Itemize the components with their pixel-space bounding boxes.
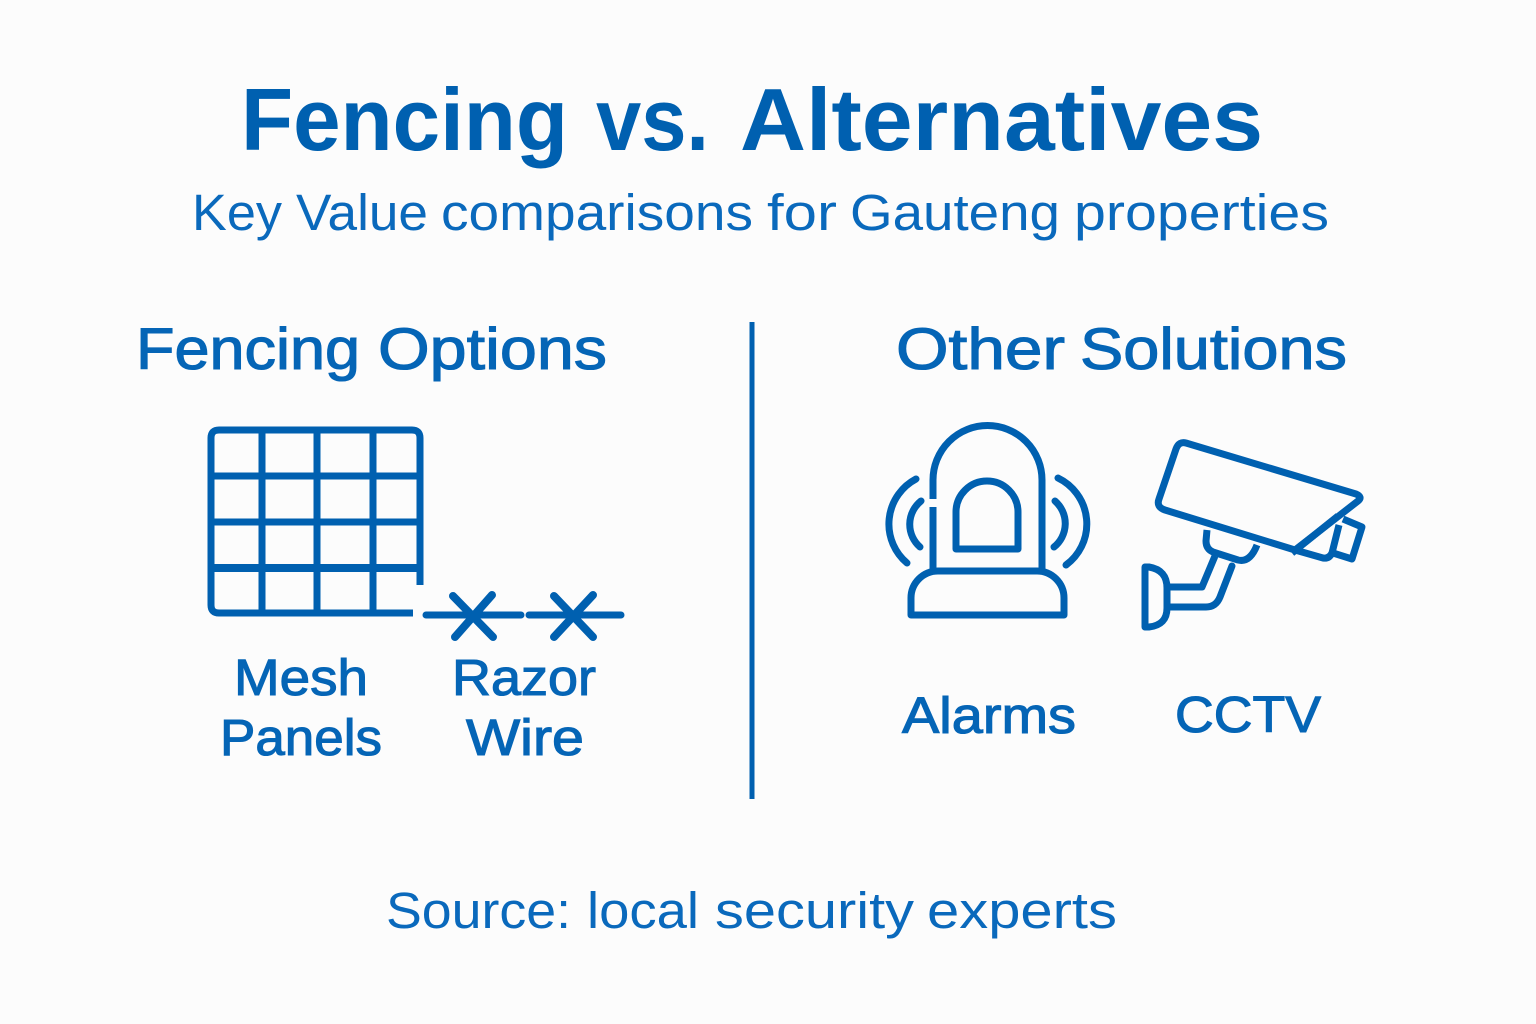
heading: fencing options: Fencing: [136, 317, 360, 382]
title: [241, 70, 1263, 169]
subtitle: properties: [1074, 184, 1329, 241]
label: mesh panels: [220, 649, 382, 766]
source note: experts: [927, 882, 1117, 939]
icon: mesh panel: [211, 430, 420, 613]
subtitle: comparisons: [441, 184, 753, 241]
source note: security: [715, 882, 915, 939]
icon: cctv camera: [1145, 443, 1362, 627]
source note: local: [587, 882, 699, 939]
label: razor wire: Wire: [466, 709, 584, 766]
heading: fencing options: Options: [378, 317, 607, 382]
label: mesh panels: Mesh: [234, 649, 368, 706]
title: Fencing: [241, 70, 568, 169]
heading: fencing options: [136, 317, 607, 382]
subtitle: [192, 184, 1329, 241]
title: vs.: [596, 70, 709, 169]
icon: alarm: [889, 425, 1087, 615]
subtitle: for: [767, 184, 837, 241]
label: mesh panels: Panels: [220, 709, 382, 766]
heading: other solutions: [896, 317, 1347, 382]
source note: [386, 882, 1117, 939]
icon: razor wire: [426, 595, 621, 637]
label: razor wire: [452, 649, 596, 766]
subtitle: Value: [296, 184, 428, 241]
subtitle: Gauteng: [850, 184, 1060, 241]
center divider: [750, 322, 754, 799]
label: razor wire: Razor: [452, 649, 596, 706]
label: alarms: Alarms: [902, 687, 1076, 744]
heading: other solutions: Other: [896, 317, 1065, 382]
label: cctv: CCTV: [1175, 686, 1321, 743]
subtitle: Key: [192, 184, 283, 241]
title: Alternatives: [740, 70, 1263, 169]
source note: Source:: [386, 882, 571, 939]
heading: other solutions: Solutions: [1080, 317, 1347, 382]
